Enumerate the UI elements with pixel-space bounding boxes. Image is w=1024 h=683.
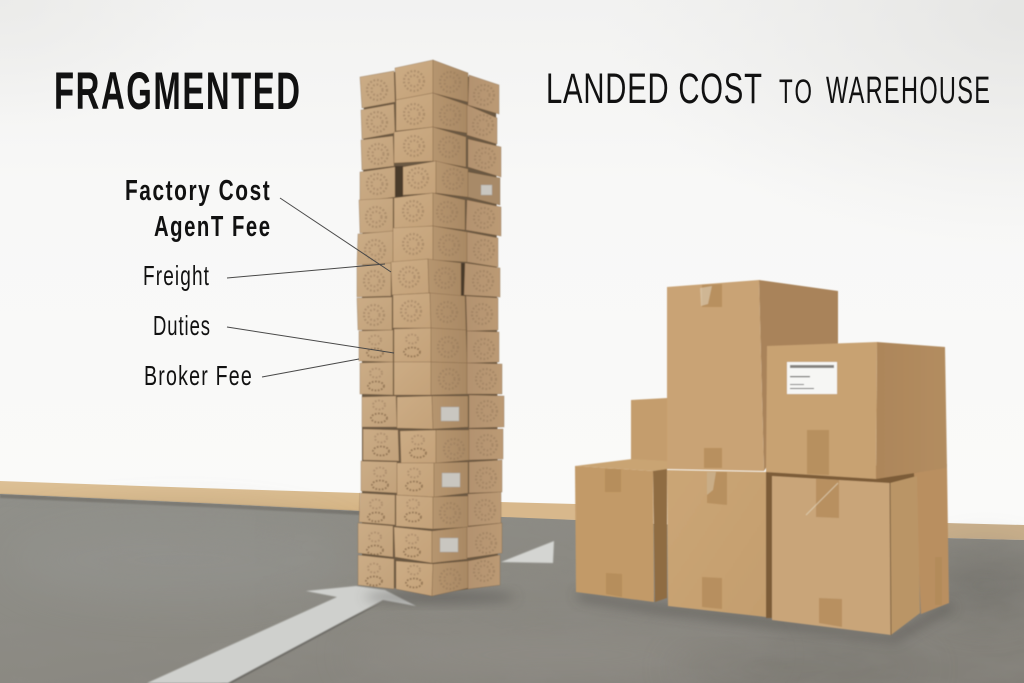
tower row 12 bbox=[363, 429, 503, 463]
box: small back box bbox=[631, 398, 667, 466]
label: Duties: Duties bbox=[153, 311, 210, 342]
box: lower right box bbox=[772, 476, 920, 635]
consolidated cardboard boxes bbox=[575, 280, 949, 635]
tower row 16 bbox=[358, 555, 500, 596]
baseboard bbox=[0, 481, 1024, 540]
heading: LANDED COST to WAREHOUSE: WAREHOUSE bbox=[826, 68, 990, 111]
label: Broker Fee: Broker Fee bbox=[144, 361, 252, 392]
tower row 4 with pulled-out gap bbox=[360, 161, 500, 205]
concrete floor bbox=[0, 490, 1024, 683]
heading: LANDED COST to WAREHOUSE: TO bbox=[779, 73, 812, 111]
tower row 5 bbox=[359, 193, 501, 236]
box stack shadow bbox=[575, 592, 955, 642]
box: lower middle box bbox=[667, 470, 766, 617]
tower row 15 bbox=[358, 523, 502, 563]
floor arrow: small chalk mark behind the tower bbox=[501, 541, 554, 563]
tower row 13 bbox=[361, 460, 502, 497]
leader line: Duties bbox=[227, 327, 394, 353]
tower row 1 bbox=[360, 60, 499, 114]
tower row 8 bbox=[357, 293, 498, 331]
tower shadow bbox=[364, 591, 516, 603]
title: FRAGMENTED: FRAGMENTED bbox=[54, 62, 300, 121]
tower row 3 bbox=[361, 127, 501, 177]
tower row 7 with gap bbox=[357, 259, 500, 297]
leader line: Broker Fee bbox=[262, 359, 359, 377]
wall background bbox=[0, 0, 1024, 530]
leader line: Freight bbox=[227, 264, 385, 278]
tower row 14 bbox=[359, 492, 501, 529]
box: rear right box bbox=[914, 467, 949, 614]
label: Factory Cost: Factory Cost bbox=[125, 175, 270, 207]
tower row 9 bbox=[359, 328, 499, 363]
tower row 6 bbox=[357, 226, 498, 267]
label: Agent Fee: AgenT Fee bbox=[154, 211, 270, 243]
shipping label bbox=[787, 362, 837, 394]
heading: LANDED COST to WAREHOUSE bbox=[546, 64, 990, 112]
stacked block tower bbox=[357, 60, 504, 596]
leader line: Factory Cost / Agent Fee bbox=[280, 198, 391, 272]
floor arrow: chalk arrow leading to the tower bbox=[147, 586, 416, 683]
tower row 11 bbox=[362, 395, 504, 429]
box: tall top box bbox=[667, 280, 838, 471]
box: lower left box bbox=[575, 459, 667, 602]
box: upper right box with shipping label bbox=[766, 342, 947, 479]
label: Freight: Freight bbox=[143, 260, 209, 292]
tower row 2 bbox=[361, 93, 497, 144]
tower row 10 bbox=[360, 362, 502, 395]
heading: LANDED COST to WAREHOUSE: LANDED COST bbox=[546, 64, 762, 112]
